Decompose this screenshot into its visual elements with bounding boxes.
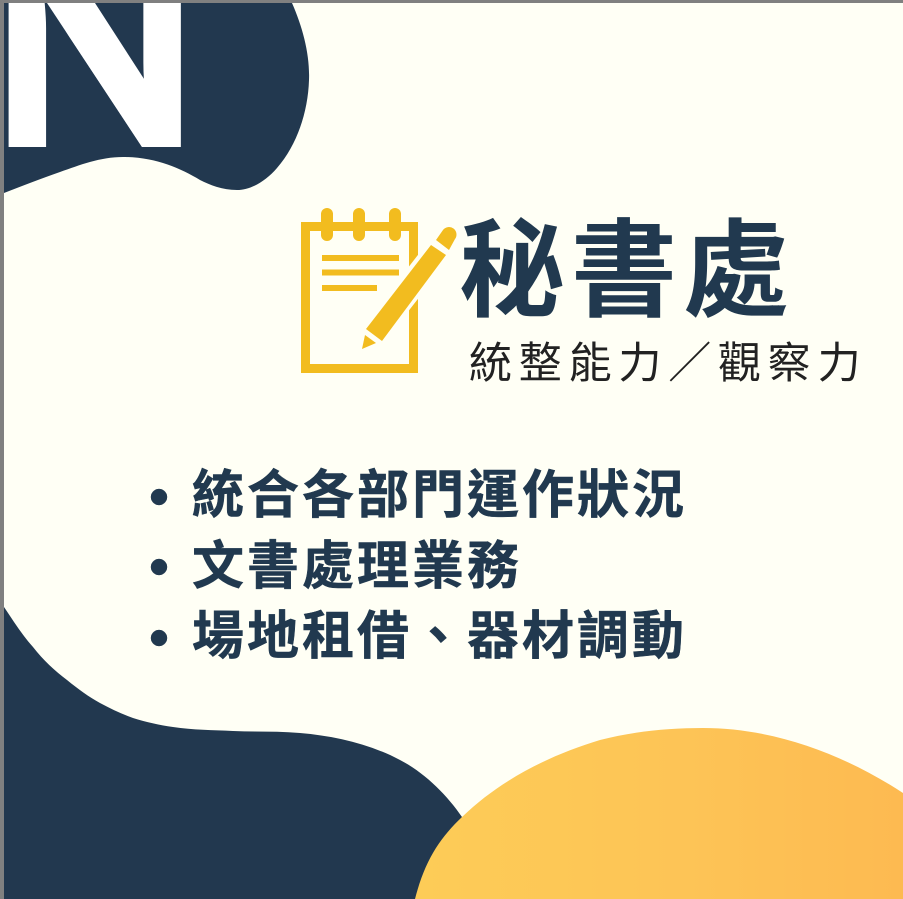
bottom-right orange circle (415, 728, 903, 899)
notepad page (306, 226, 414, 368)
notepad lines (322, 255, 399, 291)
screenshot frame: top edge (0, 0, 903, 3)
top-left navy blob (4, 3, 309, 193)
bullet list (151, 467, 687, 666)
icon: notepad and pencil (306, 208, 456, 368)
bullet item 3: 場地租借、器材調動 (192, 608, 687, 666)
subtitle: 統整能力／觀察力 (469, 340, 867, 388)
notepad rings (321, 208, 401, 241)
bullet item 1: 統合各部門運作狀況 (192, 467, 687, 525)
bullet item 2: 文書處理業務 (192, 538, 522, 596)
title: 秘書處 (459, 213, 795, 331)
bottom-left navy blob (4, 607, 462, 899)
pencil halo (372, 246, 442, 336)
logo letter N (8, 3, 181, 147)
screenshot frame: left edge (0, 0, 4, 899)
pencil (362, 227, 456, 349)
